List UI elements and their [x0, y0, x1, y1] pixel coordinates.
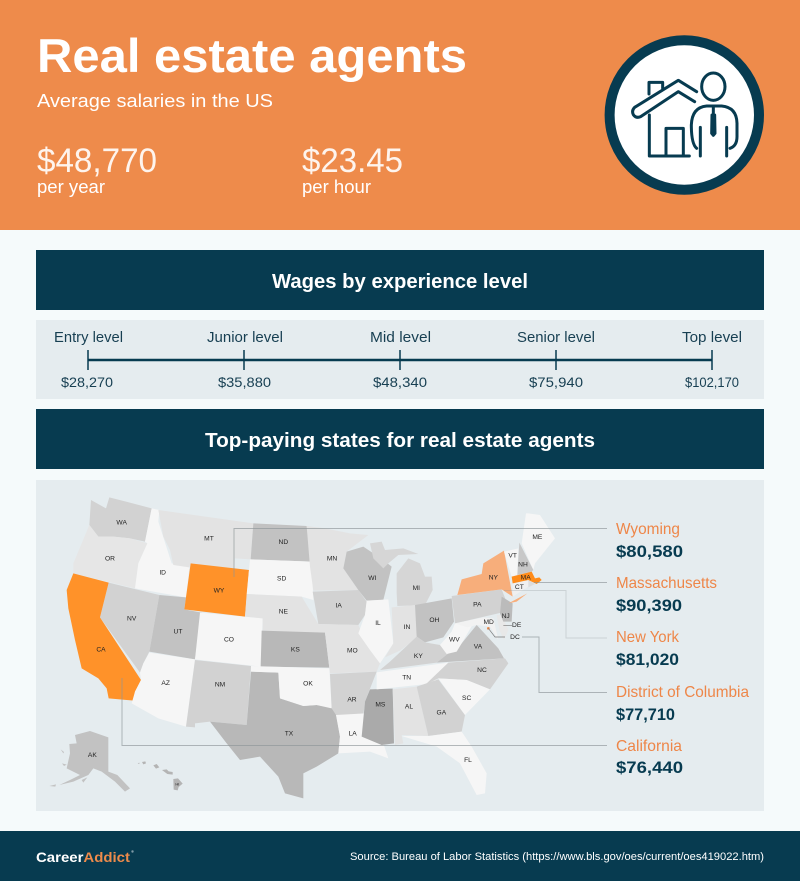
- callout: california: [616, 738, 683, 777]
- entry level: Entry level: [54, 329, 123, 346]
- us map: western and central states: AR: [347, 696, 357, 703]
- us map: eastern states: KY: [414, 653, 423, 660]
- us map: eastern states: CT: [515, 584, 524, 591]
- junior level: [207, 329, 283, 390]
- us map: eastern states: VA: [474, 643, 483, 650]
- subtitle: Average salaries in the US: [37, 91, 273, 111]
- yearly salary: $48,770: [37, 142, 157, 180]
- us map: eastern states: DE: [512, 622, 522, 629]
- callout: massachusetts: Massachusetts: [616, 575, 717, 592]
- us map: western and central states: WY: [214, 588, 225, 595]
- callout: district of columbia: $77,710: [616, 705, 675, 724]
- top level: $102,170: [685, 374, 739, 390]
- us map: eastern states: MA: [521, 574, 531, 581]
- us map: eastern states: IN: [404, 624, 411, 631]
- footer: [0, 831, 800, 881]
- entry level: [54, 329, 123, 390]
- us map: eastern states: SC: [462, 695, 471, 702]
- us map: western and central states: ID: [159, 569, 166, 576]
- us map: western and central states: LA: [349, 730, 357, 737]
- us map: western and central states: SD: [277, 576, 286, 583]
- heading: top-paying states: Top-paying states for real estate agents: [205, 430, 595, 452]
- source: Source: Bureau of Labor Statistics (https://www.bls.gov/oes/current/oes419022.htm): [350, 851, 764, 863]
- us map: western and central states: OK: [303, 681, 313, 688]
- brand logo: CareerAddict: [36, 849, 130, 865]
- callout: new york: [616, 629, 680, 669]
- us map: western and central states: ND: [279, 539, 288, 546]
- us map: eastern states: MI: [413, 585, 420, 592]
- us map: western and central states: IA: [336, 603, 342, 610]
- us map: eastern states: ME: [532, 534, 543, 541]
- yearly salary: [37, 142, 157, 197]
- us map: western and central states: KS: [291, 646, 300, 653]
- callout: wyoming: $80,580: [616, 542, 683, 561]
- mid level: Mid level: [370, 329, 431, 346]
- top level: [682, 329, 742, 390]
- us map: eastern states: MD: [483, 619, 494, 626]
- us map: western and central states: UT: [174, 629, 182, 636]
- junior level: $35,880: [218, 374, 271, 390]
- panel: experience timeline: [36, 320, 764, 399]
- hawaii: HI: [175, 781, 179, 786]
- us map: eastern states: PA: [473, 602, 482, 609]
- senior level: Senior level: [517, 329, 595, 346]
- yearly salary: per year: [37, 177, 105, 197]
- mid level: [370, 329, 431, 390]
- entry level: $28,270: [61, 374, 113, 390]
- hourly salary: [302, 142, 403, 197]
- junior level: Junior level: [207, 329, 283, 346]
- us map: western and central states: NE: [279, 609, 289, 616]
- callout: new york: New York: [616, 629, 680, 646]
- us map: eastern states: AL: [405, 704, 413, 711]
- us map: western and central states: [49, 497, 394, 798]
- us map: eastern states: TN: [402, 674, 411, 681]
- callout: district of columbia: District of Columbia: [616, 684, 749, 701]
- callout: wyoming: Wyoming: [616, 521, 680, 538]
- header banner: [0, 0, 800, 230]
- us map: western and central states: NM: [215, 682, 225, 689]
- us map: eastern states: WV: [449, 637, 460, 644]
- callout: district of columbia: [616, 684, 749, 724]
- us map: western and central states: NV: [127, 616, 137, 623]
- us map: eastern states: VT: [508, 553, 517, 560]
- callout: new york: $81,020: [616, 650, 679, 669]
- us map: western and central states: CO: [224, 637, 234, 644]
- us map: eastern states: [370, 513, 555, 795]
- top level: Top level: [682, 329, 742, 346]
- senior level: [517, 329, 595, 390]
- hourly salary: $23.45: [302, 142, 403, 180]
- us map: western and central states: TX: [285, 730, 294, 737]
- callout: wyoming: [616, 521, 683, 561]
- heading: wages by experience level: Wages by experience level: [272, 271, 528, 293]
- mid level: $48,340: [373, 374, 427, 390]
- heading: wages by experience level: [36, 250, 764, 310]
- senior level: $75,940: [529, 374, 583, 390]
- us map: western and central states: MS: [375, 702, 386, 709]
- alaska: AK: [88, 752, 97, 759]
- us map: eastern states: NY: [489, 574, 499, 581]
- us map: western and central states: IL: [375, 620, 381, 627]
- us map: eastern states: OH: [429, 617, 440, 624]
- title: Real estate agents: [37, 29, 467, 82]
- us map: western and central states: MT: [204, 536, 214, 543]
- hourly salary: per hour: [302, 177, 371, 197]
- us map: western and central states: OR: [105, 556, 115, 563]
- callout: california: California: [616, 738, 682, 755]
- us map: western and central states: CA: [96, 647, 106, 654]
- us map: western and central states: AZ: [161, 680, 170, 687]
- us map: eastern states: NJ: [502, 613, 510, 620]
- us map: western and central states: WA: [116, 520, 127, 527]
- us map: western and central states: WI: [368, 575, 377, 582]
- hawaii: [138, 761, 183, 790]
- us map: eastern states: NH: [518, 561, 528, 568]
- us map: western and central states: MN: [327, 555, 337, 562]
- leader lines: [122, 528, 607, 746]
- us map: western and central states: MO: [347, 648, 358, 655]
- icon: agent and house: [610, 40, 759, 190]
- us map: eastern states: DC: [510, 634, 520, 641]
- us map: eastern states: FL: [464, 757, 472, 764]
- us map: eastern states: GA: [437, 709, 447, 716]
- heading: top-paying states: [36, 409, 764, 469]
- callout: massachusetts: $90,390: [616, 596, 682, 615]
- panel: map of top-paying states: [36, 480, 764, 811]
- callout: massachusetts: [616, 575, 717, 615]
- alaska: [49, 731, 130, 792]
- us map: eastern states: NC: [477, 667, 487, 674]
- callout: california: $76,440: [616, 758, 683, 777]
